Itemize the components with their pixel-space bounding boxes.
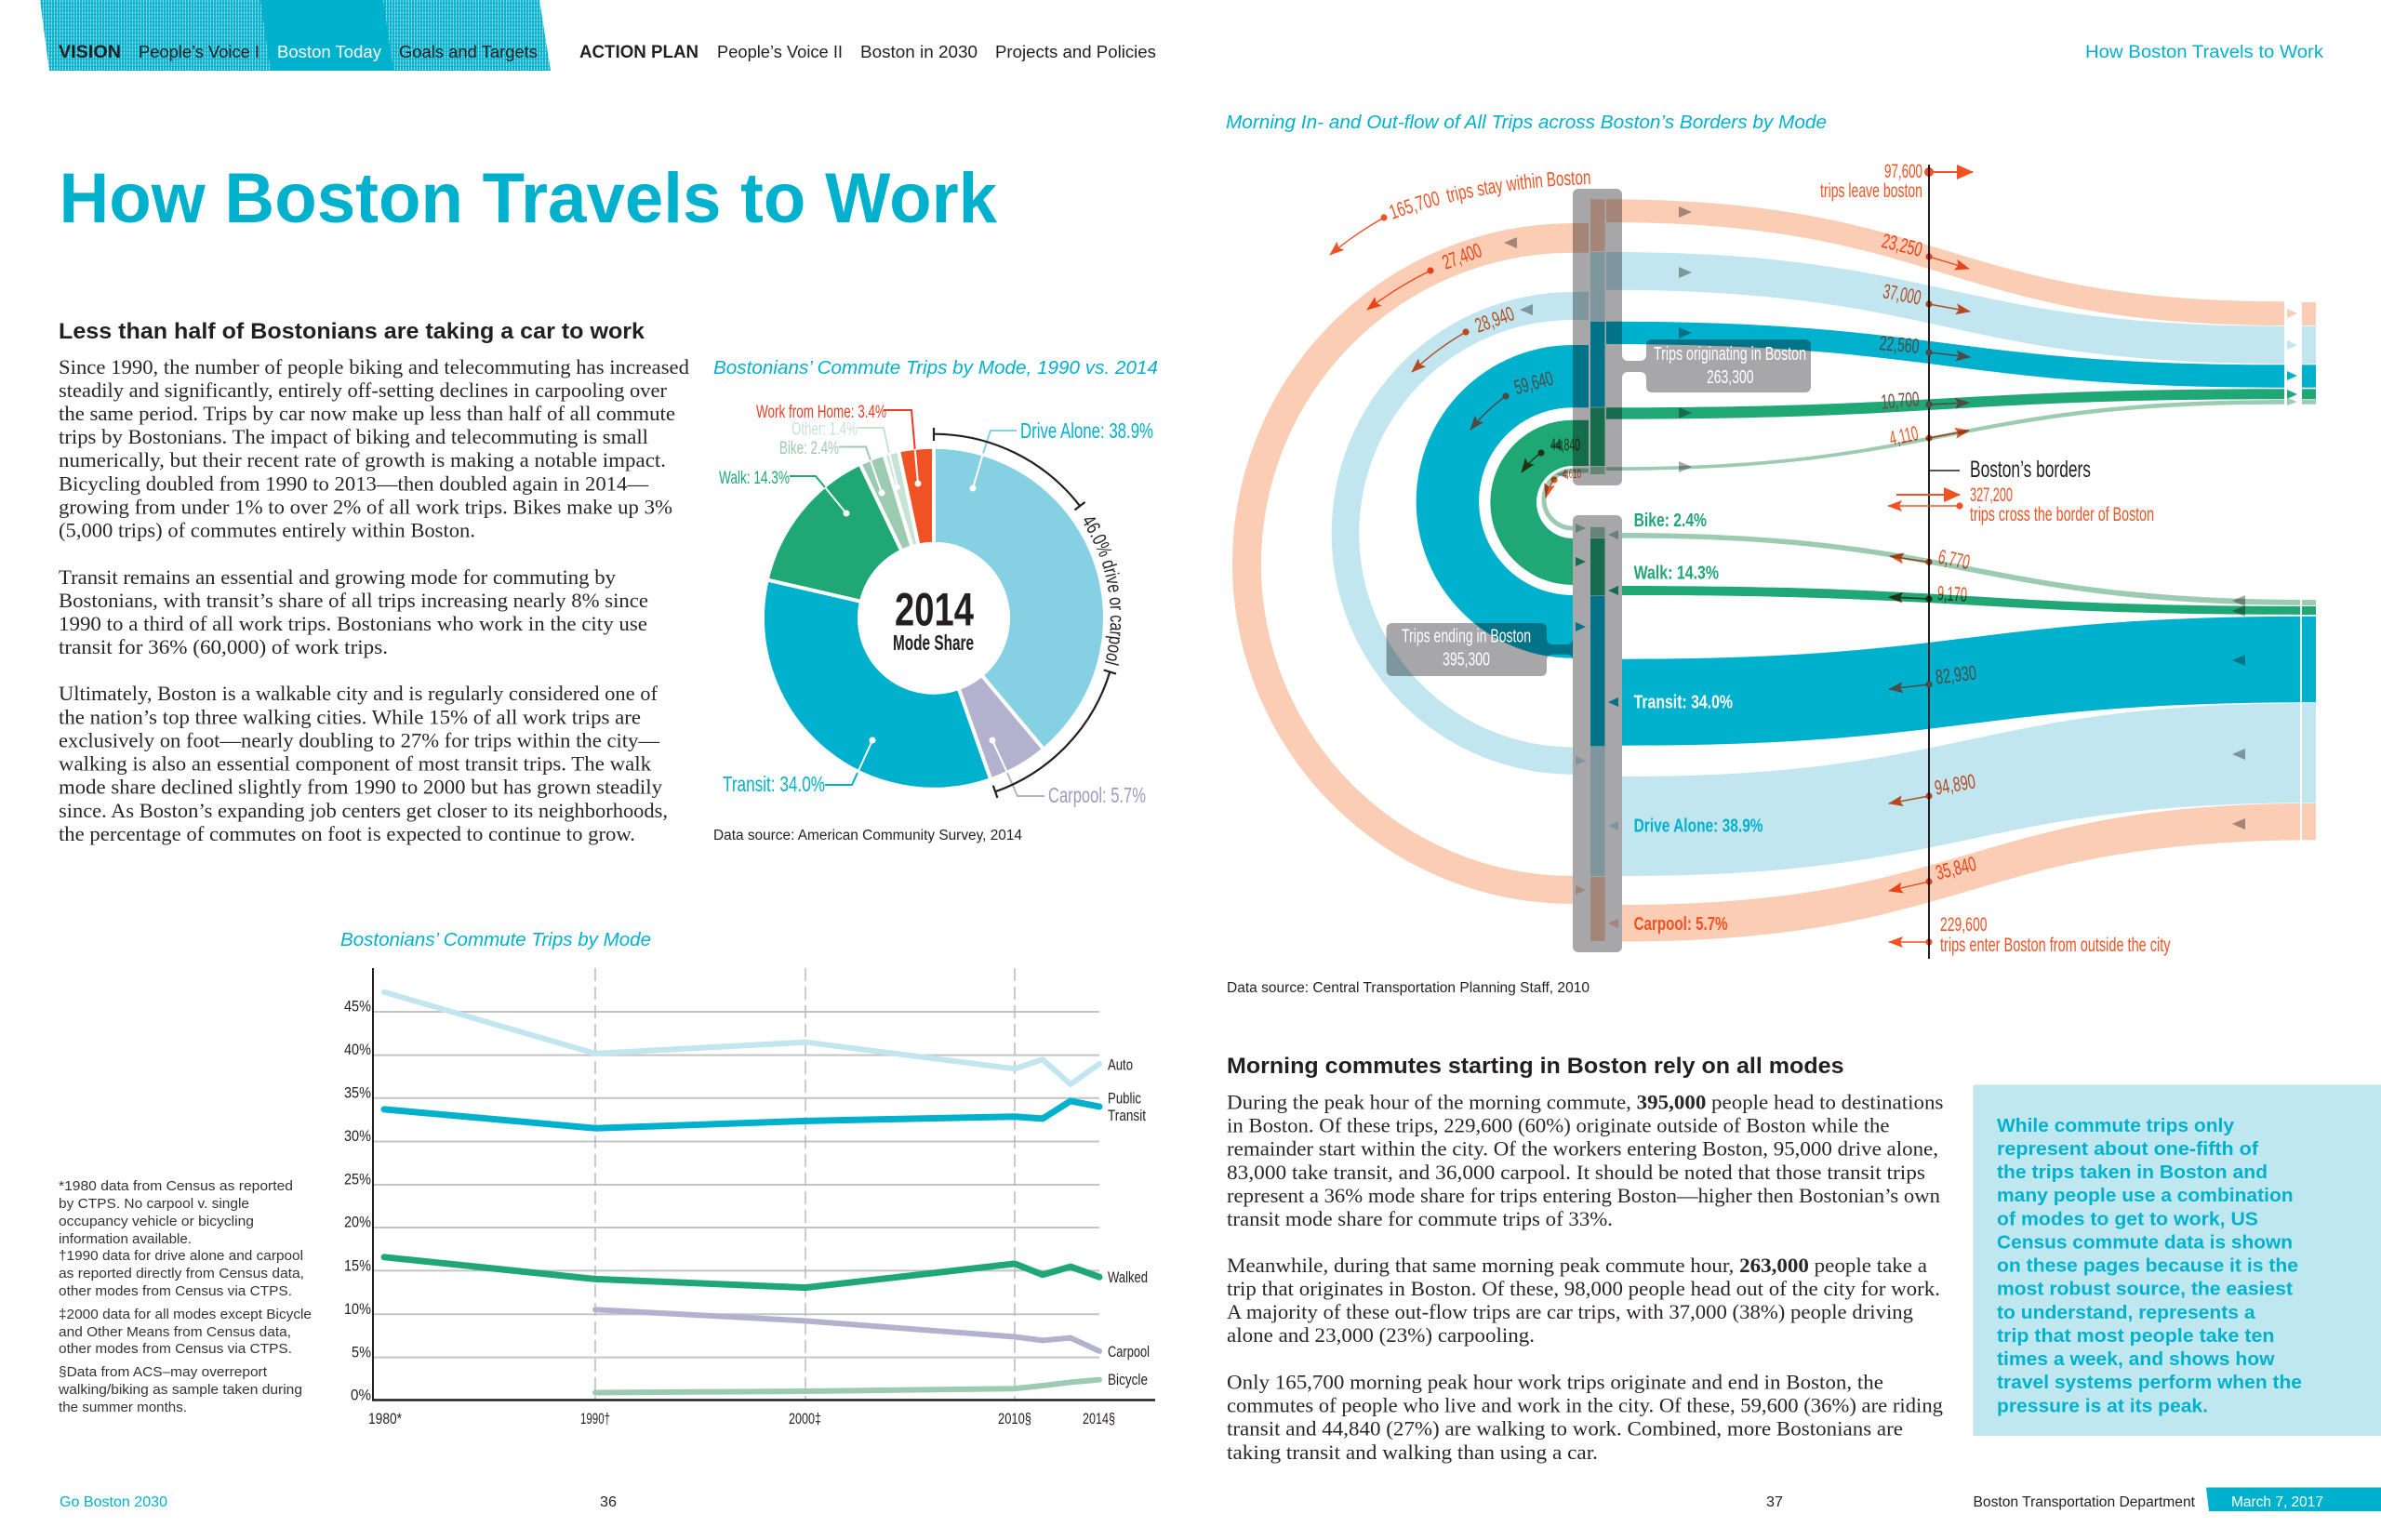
callout panel: trip that most people take ten bbox=[1997, 1325, 2275, 1347]
paragraph: biking and telecommuting: Since 1990, the number of people biking and telecommuting has increased bbox=[59, 355, 689, 378]
paragraph: transit: transit for 36% (60,000) of work trips. bbox=[59, 635, 388, 658]
paragraph: trips originating in Boston: Meanwhile, during that same morning peak commute hour, 263,000 people take a bbox=[1227, 1254, 1927, 1277]
label: trips ending bbox=[1402, 627, 1531, 670]
paragraph: trips ending in Boston: represent a 36% mode share for trips entering Boston—higher then Bostonian’s own bbox=[1227, 1184, 1940, 1207]
x-axis labels bbox=[368, 1410, 1115, 1427]
data source: Data source: American Community Survey, 2014 bbox=[713, 828, 1022, 843]
bracket: 46.0% drive or carpool bbox=[932, 428, 1122, 798]
annotations: internal trips: 27,400 bbox=[1439, 238, 1484, 274]
callout: other: Other: 1.4% bbox=[791, 420, 858, 439]
annotation: boston's borders bbox=[1888, 457, 2154, 525]
paragraph: trips within Boston: taking transit and walking than using a car. bbox=[1227, 1440, 1598, 1464]
chart title: Bostonians’ Commute Trips by Mode bbox=[340, 930, 651, 950]
annotations: outbound bbox=[1820, 161, 1973, 450]
callout: drive alone: Drive Alone: 38.9% bbox=[1020, 418, 1153, 443]
annotations: inbound: 6,770 bbox=[1936, 545, 1972, 574]
callout: carpool bbox=[990, 737, 1146, 807]
series labels: Walked bbox=[1108, 1268, 1148, 1286]
annotation: boston's borders: 327,200 bbox=[1970, 485, 2013, 506]
paragraph: transit: Bostonians, with transit’s share of all trips increasing nearly 8% since bbox=[59, 589, 648, 612]
paragraph: biking and telecommuting: numerically, but their recent rate of growth is making a notable impact. bbox=[59, 448, 666, 471]
series: carpool bbox=[595, 1309, 1099, 1351]
y-axis labels: 15% bbox=[344, 1257, 371, 1274]
annotations over transit flows: 82,930 bbox=[1935, 660, 1977, 689]
annotations: outbound: 23,250 bbox=[1880, 229, 1924, 261]
sankey diagram: morning in- and out-flow bbox=[1226, 113, 2316, 996]
series: auto bbox=[384, 992, 1099, 1084]
annotations over transit flows: 10,700 bbox=[1880, 387, 1920, 414]
y-axis labels: 40% bbox=[344, 1041, 371, 1058]
paragraph: biking and telecommuting: steadily and significantly, entirely off-setting declines in carpooling over bbox=[59, 378, 668, 402]
callout: transit: Transit: 34.0% bbox=[723, 772, 825, 796]
callout panel: pressure is at its peak. bbox=[1997, 1395, 2208, 1417]
annotations: internal trips bbox=[1329, 171, 1590, 498]
callout: work from home bbox=[756, 403, 921, 487]
footer bbox=[60, 1488, 2381, 1511]
chart title: Morning In- and Out-flow of All Trips across Boston’s Borders by Mode bbox=[1226, 113, 1827, 133]
paragraph: walking: exclusively on foot—nearly doubling to 27% for trips within the city— bbox=[59, 729, 660, 751]
series labels: Public bbox=[1108, 1089, 1141, 1107]
annotations: inbound: 229,600 bbox=[1940, 914, 1987, 936]
series labels: Carpool bbox=[1108, 1343, 1150, 1361]
navigation bar: ACTION PLAN bbox=[579, 43, 698, 62]
paragraph: trips originating in Boston bbox=[1227, 1254, 1940, 1347]
x-axis labels: 2000‡ bbox=[789, 1410, 821, 1427]
callout: walk bbox=[719, 469, 850, 517]
paragraph: walking: the nation’s top three walking cities. While 15% of all work trips are bbox=[59, 705, 641, 729]
paragraph: trips ending in Boston: remainder start within the city. Of the workers entering Boston, 95,000 drive alone, bbox=[1227, 1137, 1938, 1161]
paragraph: trips within Boston bbox=[1227, 1371, 1943, 1464]
y-axis labels: 30% bbox=[344, 1127, 371, 1145]
footer: March 7, 2017 bbox=[2231, 1494, 2323, 1510]
navigation bar: Goals and Targets bbox=[399, 43, 538, 61]
navigation bar: VISION bbox=[59, 43, 121, 62]
y-axis labels: 45% bbox=[344, 997, 371, 1016]
mode labels: Carpool: 5.7% bbox=[1634, 914, 1728, 935]
label: trips originating: 263,300 bbox=[1707, 367, 1754, 388]
paragraph: trips originating in Boston: A majority of these out-flow trips are car trips, with 37,000 (38%) people driving bbox=[1227, 1300, 1913, 1323]
navigation bar bbox=[40, 0, 1156, 71]
left article bbox=[59, 319, 689, 845]
footnotes: information available. bbox=[59, 1231, 192, 1247]
footnotes: ‡2000 data for all modes except Bicycle bbox=[59, 1307, 312, 1322]
callout: bike bbox=[779, 439, 885, 497]
callout: drive alone bbox=[969, 418, 1153, 491]
y-axis labels: 0% bbox=[351, 1386, 371, 1404]
paragraph: biking and telecommuting: Bicycling doubled from 1990 to 2013—then doubled again in 2014— bbox=[59, 472, 649, 495]
inbound flows bbox=[1622, 533, 2316, 941]
donut segments bbox=[763, 447, 1105, 790]
paragraph: biking and telecommuting: growing from under 1% to over 2% of all work trips. Bikes make up 3% bbox=[59, 495, 672, 519]
footnotes: §Data from ACS–may overreport bbox=[59, 1364, 268, 1380]
donut chart: 2014 mode share bbox=[713, 358, 1158, 843]
paragraph: trips within Boston: transit and 44,840 (27%) are walking to work. Combined, more Bostonians are bbox=[1227, 1417, 1903, 1440]
paragraph: trips originating in Boston: alone and 23,000 (23%) carpooling. bbox=[1227, 1323, 1535, 1347]
series: bicycle bbox=[595, 1380, 1099, 1393]
data source: Data source: Central Transportation Planning Staff, 2010 bbox=[1227, 980, 1590, 996]
paragraph: trips within Boston: commutes of people who live and work in the city. Of these, 59,600 (36%) are riding bbox=[1227, 1394, 1943, 1417]
mode labels bbox=[1634, 511, 1763, 935]
navigation bar: People’s Voice II bbox=[717, 43, 843, 61]
annotations: internal trips: 165,700 trips stay within Boston bbox=[1390, 171, 1590, 219]
paragraph: biking and telecommuting: (5,000 trips) of commutes entirely within Boston. bbox=[59, 519, 475, 541]
x-axis labels: 1980* bbox=[368, 1410, 402, 1427]
axes bbox=[372, 968, 1155, 1401]
annotations over transit flows bbox=[1470, 331, 1977, 689]
chart title: Bostonians’ Commute Trips by Mode, 1990 vs. 2014 bbox=[713, 358, 1158, 378]
footnotes: as reported directly from Census data, bbox=[59, 1266, 304, 1281]
label: trips originating: Trips originating in Boston bbox=[1654, 344, 1806, 365]
series labels: Bicycle bbox=[1108, 1371, 1148, 1388]
callout panel: travel systems perform when the bbox=[1997, 1372, 2302, 1393]
annotations: outbound: 37,000 bbox=[1882, 279, 1923, 310]
paragraph: trips ending in Boston: in Boston. Of these trips, 229,600 (60%) originate outside of Boston while the bbox=[1227, 1114, 1890, 1137]
series labels: Transit bbox=[1108, 1107, 1146, 1124]
y-axis labels bbox=[344, 997, 371, 1404]
callout: carpool: Carpool: 5.7% bbox=[1048, 783, 1146, 807]
annotations: outbound: trips leave boston bbox=[1820, 180, 1922, 202]
paragraph: walking: mode share declined slightly from 1990 to 2000 but has grown steadily bbox=[59, 776, 662, 798]
annotations: inbound: 94,890 bbox=[1933, 769, 1977, 800]
label: trips originating bbox=[1654, 344, 1806, 388]
annotations: outbound: 4,110 bbox=[1887, 421, 1921, 450]
paragraph: transit bbox=[59, 565, 648, 658]
callout: other bbox=[791, 420, 900, 490]
annotations: inbound: 35,840 bbox=[1934, 852, 1978, 884]
annotation: boston's borders: Boston’s borders bbox=[1970, 457, 2091, 483]
footer: Boston Transportation Department bbox=[1974, 1494, 2196, 1510]
callout panel bbox=[1974, 1084, 2381, 1436]
x-axis labels: 2014§ bbox=[1083, 1410, 1115, 1427]
navigation bar: Boston Today bbox=[277, 43, 381, 61]
outbound flows bbox=[1606, 199, 2316, 471]
annotations: outbound: 97,600 bbox=[1884, 161, 1922, 182]
footer: Go Boston 2030 bbox=[60, 1494, 167, 1510]
running header: How Boston Travels to Work bbox=[2085, 43, 2324, 62]
right article bbox=[1227, 1054, 1943, 1464]
paragraph: biking and telecommuting: the same period. Trips by car now make up less than half of all commute bbox=[59, 402, 675, 425]
callout panel: most robust source, the easiest bbox=[1997, 1278, 2293, 1300]
bracket: 46.0% drive or carpool: 46.0% drive or carpool bbox=[1084, 517, 1122, 666]
line chart: commute trips by mode bbox=[340, 930, 1155, 1427]
mode labels: Transit: 34.0% bbox=[1634, 692, 1733, 712]
mode labels: Bike: 2.4% bbox=[1634, 511, 1707, 531]
footnotes: other modes from Census via CTPS. bbox=[59, 1341, 292, 1357]
heading: Morning commutes starting in Boston rely on all modes bbox=[1227, 1054, 1843, 1079]
internal trip arcs bbox=[1232, 223, 1589, 904]
navigation bar: Projects and Policies bbox=[995, 43, 1156, 61]
navigation bar: Boston in 2030 bbox=[860, 43, 978, 61]
annotation: boston's borders: trips cross the border of Boston bbox=[1970, 504, 2154, 525]
footnotes: *1980 data from Census as reported bbox=[59, 1178, 293, 1194]
paragraph: walking: Ultimately, Boston is a walkable city and is regularly considered one of bbox=[59, 682, 658, 705]
annotations: internal trips: 44,840 bbox=[1550, 435, 1580, 454]
paragraph: trips originating in Boston: trip that originates in Boston. Of these, 98,000 people head out of the city for work. bbox=[1227, 1277, 1940, 1300]
footnotes bbox=[58, 1178, 312, 1415]
callout panel: the trips taken in Boston and bbox=[1997, 1162, 2268, 1183]
x-axis labels: 1990† bbox=[580, 1410, 610, 1427]
center label bbox=[893, 584, 974, 655]
callout: bike: Bike: 2.4% bbox=[779, 439, 839, 458]
paragraph: trips within Boston: Only 165,700 morning peak hour work trips originate and end in Boston, the bbox=[1227, 1371, 1883, 1393]
paragraph: trips ending in Boston: 83,000 take transit, and 36,000 carpool. It should be noted that those transit trips bbox=[1227, 1161, 1925, 1184]
y-axis labels: 5% bbox=[352, 1343, 371, 1361]
footnotes: the summer months. bbox=[59, 1400, 187, 1415]
annotations over transit flows: 59,640 bbox=[1511, 366, 1555, 399]
annotations: internal trips: 4,610 bbox=[1563, 466, 1581, 481]
series: walked bbox=[384, 1257, 1099, 1288]
annotations: internal trips: 28,940 bbox=[1471, 301, 1517, 338]
callout panel: on these pages because it is the bbox=[1997, 1255, 2298, 1276]
footer: 37 bbox=[1766, 1494, 1783, 1510]
paragraph: walking: since. As Boston’s expanding job centers get closer to its neighborhoods, bbox=[59, 799, 668, 822]
x-axis labels: 2010§ bbox=[998, 1410, 1031, 1427]
series labels bbox=[1108, 1056, 1150, 1388]
mode labels: Drive Alone: 38.9% bbox=[1634, 816, 1763, 837]
gray bars and label boxes bbox=[1387, 189, 1811, 952]
label: trips ending: Trips ending in Boston bbox=[1402, 627, 1531, 647]
footnotes: other modes from Census via CTPS. bbox=[59, 1283, 292, 1299]
callout panel: to understand, represents a bbox=[1997, 1302, 2255, 1323]
heading: Less than half of Bostonians are taking a car to work bbox=[59, 319, 645, 344]
arrows inside lower bar bbox=[1576, 524, 1618, 928]
footnotes: walking/biking as sample taken during bbox=[58, 1382, 302, 1398]
y-axis labels: 35% bbox=[344, 1084, 371, 1101]
title: How Boston Travels to Work bbox=[60, 159, 998, 238]
callout panel: times a week, and shows how bbox=[1997, 1348, 2275, 1370]
callout: work from home: Work from Home: 3.4% bbox=[756, 403, 886, 422]
y-axis labels: 10% bbox=[344, 1300, 371, 1318]
paragraph: transit: 1990 to a third of all work trips. Bostonians who work in the city use bbox=[59, 612, 647, 635]
flow direction arrows bbox=[1504, 206, 2245, 830]
callout panel: many people use a combination bbox=[1997, 1185, 2294, 1206]
callout panel: represent about one-fifth of bbox=[1997, 1138, 2258, 1160]
boston mode strip bbox=[1590, 199, 1605, 941]
paragraph: transit: Transit remains an essential and growing mode for commuting by bbox=[59, 565, 616, 589]
y-axis labels: 20% bbox=[344, 1213, 371, 1231]
paragraph: walking bbox=[59, 682, 668, 845]
center label: Mode Share bbox=[893, 631, 974, 655]
callout panel: Census commute data is shown bbox=[1997, 1231, 2293, 1254]
y-axis labels: 25% bbox=[344, 1170, 371, 1188]
series labels: Auto bbox=[1108, 1056, 1133, 1074]
callout: transit bbox=[723, 737, 876, 796]
mode labels: Walk: 14.3% bbox=[1634, 564, 1719, 584]
annotations over transit flows: 22,560 bbox=[1879, 331, 1921, 358]
footnotes: and Other Means from Census data, bbox=[59, 1324, 291, 1340]
label: trips ending: 395,300 bbox=[1443, 650, 1490, 670]
paragraph: walking: the percentage of commutes on foot is expected to continue to grow. bbox=[59, 822, 635, 845]
callout: walk: Walk: 14.3% bbox=[719, 469, 790, 488]
callout panel: of modes to get to work, US bbox=[1997, 1209, 2258, 1229]
annotations: inbound bbox=[1889, 545, 2171, 956]
paragraph: trips ending in Boston bbox=[1227, 1090, 1943, 1230]
footnotes: by CTPS. No carpool v. single bbox=[59, 1196, 249, 1212]
borders line bbox=[1928, 165, 1930, 959]
footnotes: occupancy vehicle or bicycling bbox=[59, 1214, 254, 1229]
annotations: inbound: trips enter Boston from outside the city bbox=[1940, 935, 2171, 956]
footer: 36 bbox=[600, 1494, 617, 1510]
paragraph: trips ending in Boston: transit mode share for commute trips of 33%. bbox=[1227, 1207, 1613, 1230]
callout panel: While commute trips only bbox=[1997, 1115, 2235, 1136]
paragraph: biking and telecommuting bbox=[59, 355, 689, 541]
series: public transit bbox=[384, 1101, 1099, 1128]
outbound stub arrows bbox=[2287, 309, 2297, 405]
paragraph: trips ending in Boston: During the peak hour of the morning commute, 395,000 people head to destinations bbox=[1227, 1090, 1943, 1114]
annotations: inbound: 9,170 bbox=[1936, 581, 1968, 606]
center label: 2014 bbox=[895, 584, 974, 636]
navigation bar: People’s Voice I bbox=[139, 43, 259, 61]
paragraph: biking and telecommuting: trips by Bostonians. The impact of biking and telecommuting is small bbox=[59, 425, 648, 448]
paragraph: walking: walking is also an essential component of most transit trips. The walk bbox=[59, 751, 651, 776]
footnotes: †1990 data for drive alone and carpool bbox=[59, 1248, 303, 1264]
